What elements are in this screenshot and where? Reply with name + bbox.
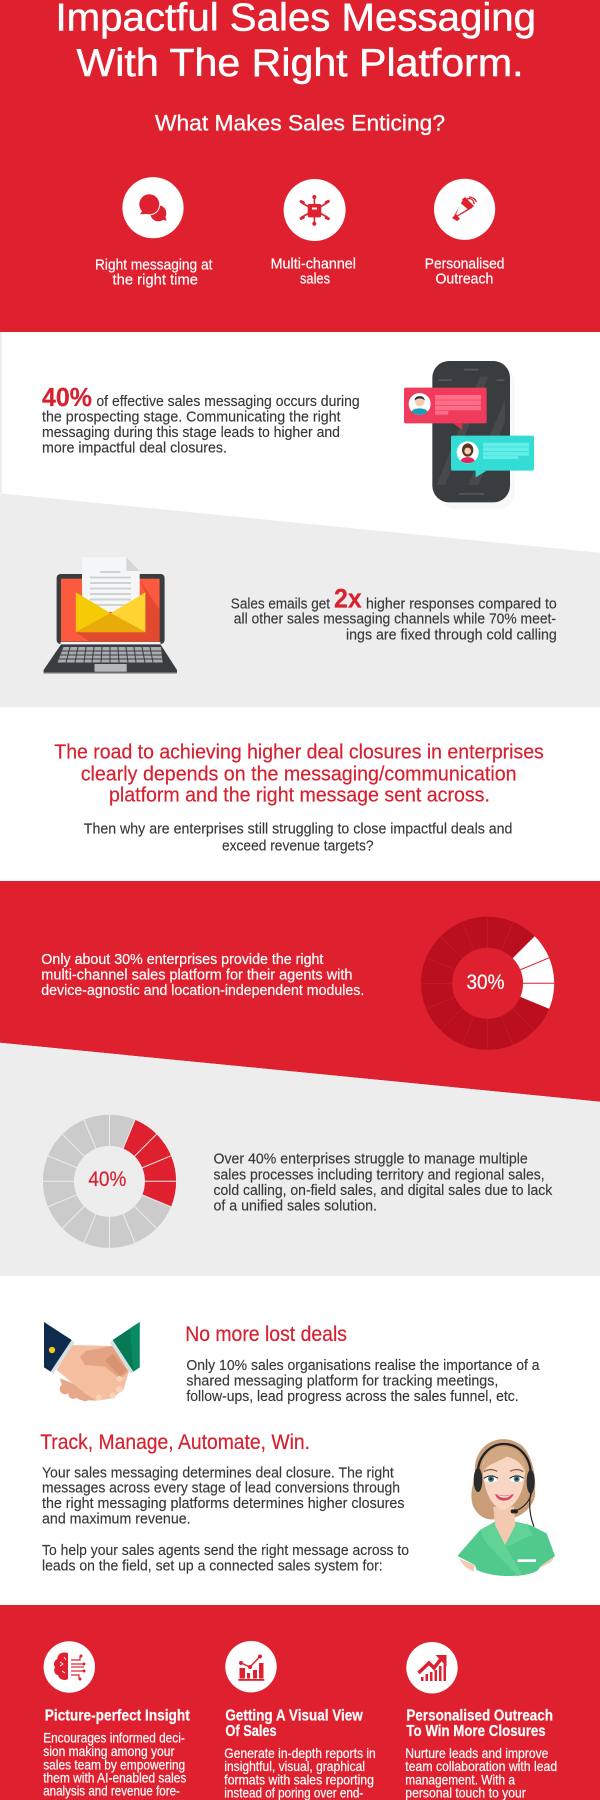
card body: sion making among your — [43, 1744, 175, 1759]
card body: Generate in-depth reports in — [224, 1746, 376, 1761]
card body: sales team by empowering — [43, 1757, 185, 1772]
card body — [43, 1731, 187, 1799]
chart: 30% donut: 30% — [466, 971, 504, 994]
stat text: 40%: 40% — [42, 384, 92, 412]
card heading: Getting A Visual View — [225, 1708, 364, 1725]
stat text: 40%: more impactful deal closures. — [42, 440, 227, 457]
chart: 40% donut: 40% — [88, 1168, 126, 1191]
icon: phone with chat bubbles — [404, 361, 534, 509]
body text: sales messaging: Your sales messaging determines deal closure. The right — [42, 1464, 395, 1481]
label: multi-channel: sales — [300, 271, 330, 288]
label: right messaging: Right messaging at — [95, 256, 213, 273]
stat text: 40%: the prospecting stage. Communicating the right — [42, 409, 341, 426]
card: personalised outreach closures — [405, 1642, 557, 1800]
card body: insightful, visual, graphical — [224, 1759, 365, 1774]
card body: personal touch to your — [405, 1785, 526, 1800]
panel: 30% enterprises — [0, 881, 600, 1102]
label: multi-channel — [271, 255, 356, 288]
illustration: support agent with headset — [457, 1439, 555, 1577]
icon: laptop with envelope — [44, 557, 177, 674]
card heading — [225, 1708, 364, 1740]
panel: connected sales system — [0, 1605, 600, 1800]
card body — [405, 1746, 557, 1800]
card body: formats with sales reporting — [224, 1772, 374, 1787]
body text: 40%: Over 40% enterprises struggle to manage multiple — [214, 1151, 528, 1168]
body text: only 10%: follow-ups, lead progress across the sales funnel, etc. — [186, 1388, 519, 1405]
label: personalised outreach: Personalised — [425, 255, 504, 272]
question text: exceed revenue targets? — [222, 838, 374, 855]
body text: 40%: of a unified sales solution. — [214, 1197, 377, 1214]
body text: only 10% — [186, 1357, 540, 1405]
stat text: 2x: Sales emails get — [231, 595, 331, 612]
body text: sales messaging: To help your sales agents send the right message across to — [42, 1542, 409, 1559]
stat text: 2x: 2x — [334, 584, 362, 614]
chart: 40% donut — [43, 1115, 176, 1248]
body text: 30%: Only about 30% enterprises provide the right — [41, 951, 324, 968]
card body: team collaboration with lead — [405, 1759, 557, 1774]
body text: sales messaging: messages across every stage of lead conversions through — [42, 1480, 400, 1497]
body text: only 10%: shared messaging platform for tracking meetings, — [186, 1372, 498, 1389]
heading: road to deal closures: clearly depends on the messaging/communication — [81, 762, 517, 785]
body text: sales messaging — [42, 1464, 409, 1575]
card heading: Personalised Outreach — [406, 1708, 553, 1725]
title: With The Right Platform. — [76, 42, 524, 85]
card body: Encourages informed deci- — [43, 1731, 185, 1746]
stat text: 2x: ings are fixed through cold calling — [346, 626, 557, 643]
body text: sales messaging: leads on the field, set up a connected sales system for: — [42, 1558, 383, 1575]
card heading: Of Sales — [225, 1723, 277, 1740]
chart: 30% donut — [421, 917, 554, 1050]
stat text: 40%: messaging during this stage leads to higher and — [42, 424, 340, 441]
stat text: 2x: higher responses compared to — [366, 595, 557, 612]
icon: bar chart with trend line — [225, 1641, 277, 1692]
panel: email statistic — [0, 493, 600, 707]
card body — [224, 1746, 376, 1800]
subtitle: What Makes Sales Enticing? — [155, 111, 445, 136]
body text: sales messaging: and maximum revenue. — [42, 1511, 191, 1528]
body text: 40%: cold calling, on-field sales, and digital sales due to lack — [214, 1182, 553, 1199]
card body: them with AI-enabled sales — [43, 1771, 187, 1786]
title — [56, 0, 536, 85]
panel: 40% enterprises — [0, 1043, 600, 1276]
card heading — [406, 1708, 553, 1740]
stat text: 2x — [231, 584, 557, 643]
heading: track manage automate win: Track, Manage, Automate, Win. — [40, 1431, 310, 1454]
icon: handshake — [44, 1322, 140, 1401]
body text: 40%: sales processes including territory and regional sales, — [214, 1166, 545, 1183]
stat text: 40% — [42, 384, 360, 457]
body text: 30% — [41, 951, 364, 999]
card: visual view of sales — [224, 1641, 376, 1800]
card body: instead of poring over end- — [224, 1785, 363, 1800]
card heading: Picture-perfect Insight — [45, 1708, 190, 1725]
label: right messaging: the right time — [112, 272, 198, 288]
body text: 40% — [214, 1151, 553, 1214]
label: personalised outreach: Outreach — [436, 271, 493, 288]
heading: no more lost deals: No more lost deals — [185, 1323, 347, 1346]
label: multi-channel: Multi-channel — [271, 255, 356, 272]
panel: track manage automate win — [40, 1431, 555, 1577]
panel: header — [0, 0, 600, 332]
label: personalised outreach — [425, 255, 504, 288]
card heading: To Win More Closures — [406, 1723, 546, 1740]
icon: chat bubbles — [122, 177, 184, 238]
icon: multi-channel hub — [284, 179, 346, 241]
panel: no more lost deals — [44, 1322, 540, 1405]
stat text: 40%: of effective sales messaging occurs during — [96, 393, 360, 410]
heading: road to deal closures — [54, 740, 544, 807]
body text: 30%: multi-channel sales platform for their agents with — [41, 966, 353, 983]
icon: growth arrow — [406, 1642, 458, 1693]
card: picture-perfect insight — [43, 1641, 190, 1799]
label: right messaging — [95, 256, 213, 288]
card body: analysis and revenue fore- — [43, 1784, 180, 1799]
icon: AI brain — [44, 1641, 95, 1693]
card body: Nurture leads and improve — [405, 1746, 548, 1761]
icon: megaphone — [434, 179, 495, 240]
stat text: 2x: all other sales messaging channels while 70% meet- — [234, 611, 556, 628]
heading: road to deal closures: platform and the right message sent across. — [109, 784, 490, 807]
body text: 30%: device-agnostic and location-independent modules. — [41, 982, 364, 999]
body text: only 10%: Only 10% sales organisations realise the importance of a — [186, 1357, 540, 1374]
question text — [84, 820, 512, 855]
heading: road to deal closures: The road to achieving higher deal closures in enterprises — [54, 740, 544, 763]
panel: road to higher deal closures — [54, 740, 544, 855]
panel: prospecting stage statistic — [0, 332, 534, 509]
body text: sales messaging: the right messaging platforms determines higher closures — [42, 1495, 404, 1512]
card body: management. With a — [405, 1772, 515, 1787]
question text: Then why are enterprises still struggling to close impactful deals and — [84, 820, 512, 837]
